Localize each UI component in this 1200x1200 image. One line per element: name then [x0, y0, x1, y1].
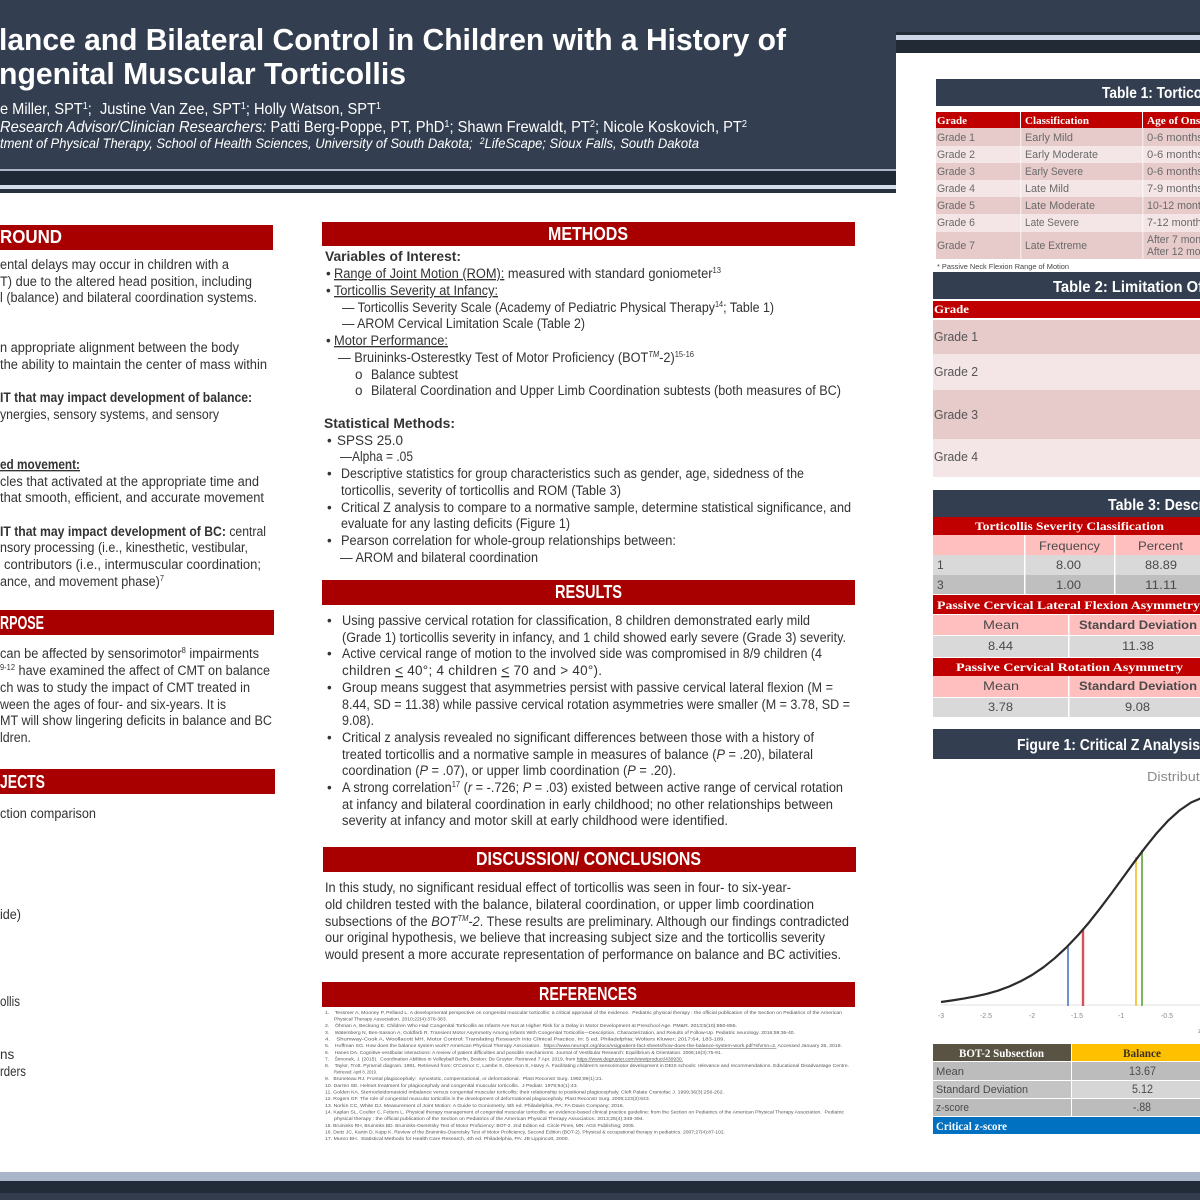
heading: references: REFERENCES — [539, 984, 637, 1004]
text block: discussion: . These results are preliminary. Although our findings contradicted — [480, 914, 871, 929]
text block: purpose: ch was to study the impact of CMT treated in — [0, 680, 250, 695]
table 3: severity classification: 8.00 — [1056, 558, 1081, 572]
text block: reference list: 11. Golden KA. Sternocleidomastoid imbalance versus congenital muscular torticollis: their relationship to positional plagiocephaly. Cleft Palate Craniofac J. 1999;36(3):256-262. — [325, 1090, 724, 1094]
authors: ; Justine Van Zee, SPT — [88, 101, 241, 118]
panel: methods — [322, 222, 855, 565]
chart: normal distribution curve: Distributi — [1147, 769, 1200, 784]
text block: reference list: Physical Therapy Association. 2010;22(4):378-383. — [334, 1016, 447, 1022]
text block: reference list: 12. Rogers GF. The role of congenital muscular torticollis in the development of deformational plagiocephaly. Plast Reconstr Surg. 2009;123(2):643. — [325, 1096, 650, 1101]
text block: discussion: our original hypothesis, we believe that increasing subject size and the torticollis severity — [325, 930, 825, 945]
text block: statistical methods: — AROM and bilateral coordination — [340, 550, 538, 565]
table 3: severity classification: 11.11 — [1145, 578, 1177, 592]
table 1 footnote: * Passive Neck Flexion Range of Motion — [937, 264, 1069, 271]
text block: background: the ability to maintain the center of mass within — [0, 357, 267, 372]
table 1 rows: Grade 1 — [937, 132, 975, 144]
table 1 rows: Grade 6 — [937, 217, 975, 229]
text block: results: • — [327, 780, 332, 795]
table 3: lateral flexion asymmetry: Standard Deviation — [1079, 618, 1197, 632]
text block: variables of interest: o — [355, 383, 363, 398]
table 2 rows: Grade 1 — [934, 329, 978, 344]
title — [0, 22, 787, 91]
text block: variables of interest: -2) — [659, 350, 675, 365]
panel: references — [322, 982, 855, 1141]
panel: table 3 — [933, 490, 1200, 717]
text block: variables of interest: Torticollis Severity at Infancy: — [334, 283, 498, 298]
text block: background: contributors (i.e., intermuscular coordination; — [4, 557, 261, 572]
chart: normal distribution curve: -2 — [1029, 1013, 1035, 1020]
table 3: rotation asymmetry: 9.08 — [1125, 700, 1150, 714]
text block: reference list: physical therapy : the official publication of the Section on Pediatrics of the American Physical Therapy Association. 2013;25(4):348-394. — [334, 1116, 644, 1121]
table 3: rotation asymmetry: Passive Cervical Rotation Asymmetry — [956, 660, 1183, 674]
heading: purpose — [0, 610, 274, 635]
text block: reference list: 5. Hoffman SG. How does the balance system work? American Physical Therapy Association. https://www.neuropt.org/docs/vsigpatient-fact-sheets/how-does-the-balance-system-work.pdf?sfvrsn=2. Accessed January 26, 2018. — [325, 1043, 842, 1048]
authors: 1 — [241, 101, 246, 112]
chart: normal distribution curve: -1.5 — [1071, 1013, 1083, 1020]
authors: ; Nicole Koskovich, PT — [595, 119, 742, 136]
authors: 2 — [590, 119, 595, 130]
text block: statistical methods: • — [327, 466, 332, 481]
text block: variables of interest: 14 — [715, 300, 724, 309]
text block: discussion: TM — [457, 914, 469, 923]
text block: variables of interest: Motor Performance: — [334, 333, 448, 348]
text block: purpose: 9-12 — [0, 663, 16, 672]
text block: variables of interest: Range of Joint Motion (ROM): measured with standard goniometer — [334, 266, 723, 281]
text block: statistical methods — [324, 416, 851, 565]
text block: variables of interest: • — [326, 266, 331, 281]
text block: results: 17 — [452, 780, 461, 789]
text block: background: ental delays may occur in children with a — [0, 257, 229, 272]
table 1 header row: Grade — [937, 116, 967, 127]
text block: background: ance, and movement phase) — [0, 574, 171, 589]
text block: results: r = -.726; P = .03) existed between active range of cervical rotation — [468, 780, 862, 795]
text block: results: • — [327, 646, 332, 661]
table 3: lateral flexion asymmetry — [933, 595, 1200, 657]
text block: variables of interest: o — [355, 367, 363, 382]
table: critical z analysis: Critical z-score — [936, 1119, 1008, 1133]
authors: 1 — [376, 101, 381, 112]
text block: statistical methods: Pearson correlation for whole-group relationships between: — [341, 533, 676, 548]
text block: purpose: 8 — [182, 646, 186, 655]
figure 1 heading — [933, 729, 1200, 759]
table 3: lateral flexion asymmetry: 11.38 — [1122, 639, 1154, 653]
text block: variables of interest: 15-16 — [675, 350, 695, 359]
table 3: severity classification: 1.00 — [1056, 578, 1081, 592]
authors: tment of Physical Therapy, School of Health Sciences, University of South Dakota; — [0, 135, 509, 151]
text block: reference list: 3. Watemberg N, Ben-Sasson A, Goldfarb R. Transient Motor Asymmetry Among Infants With Congenital Torticollis—Description, Characterization, and Results of Follow-Up. Pediatric neurology. 2016;59:36-40. — [325, 1030, 795, 1035]
text block: subjects: ollis — [0, 994, 20, 1009]
table 2 heading — [933, 272, 1200, 299]
panel: background — [0, 225, 273, 589]
text block: variables of interest: Bilateral Coordination and Upper Limb Coordination subtests (both measures of BC) — [371, 383, 841, 398]
text block: results: Critical z analysis revealed no significant differences between those with a history of — [342, 730, 814, 745]
text block: background — [0, 257, 267, 589]
text block: purpose: can be affected by sensorimotor — [0, 646, 192, 661]
panel: subjects — [0, 769, 275, 1079]
table 3: rotation asymmetry: Mean — [983, 679, 1019, 693]
text block: reference list: Retrieved: April 8, 2019. — [334, 1070, 377, 1074]
text block: background: 7 — [160, 574, 165, 583]
text block: reference list: 8. Taylor, Trott. Pyramid diagram. 1991. Retrieved from: O'Connor C, Lambe S, Gleeson S, Harvy Á. Facilitating children's sensorimotor development in DEIS schools: relevance and recommendations. Educational Disadvantage Centre. — [325, 1062, 849, 1068]
panel: purpose — [0, 610, 274, 745]
text block: statistical methods: Descriptive statistics for group characteristics such as gender, age, sidedness of the — [341, 466, 804, 481]
table 2 rows: Grade 4 — [934, 449, 978, 464]
panel: figure 1 — [933, 729, 1200, 1134]
text block: subjects: ide) — [0, 907, 21, 922]
text block: reference list: 13. Norkin CC, White DJ. Measurement of Joint Motion: A Guide to Goniometry. 5th ed. Philadelphia, PA: FA Davis Company; 2016. — [325, 1103, 624, 1108]
authors: 1 — [83, 101, 88, 112]
table: critical z analysis: BOT-2 Subsection — [959, 1046, 1044, 1060]
text block: variables of interest: — Bruininks-Osterestky Test of Motor Proficiency (BOT — [338, 350, 667, 365]
panel: discussion and conclusions — [323, 847, 856, 962]
text block: statistical methods: • — [327, 433, 332, 448]
text block: results: Using passive cervical rotation for classification, 8 children demonstrated early mild — [342, 613, 810, 628]
text block: variables of interest: Balance subtest — [371, 367, 458, 382]
table: critical z analysis: Balance — [1123, 1046, 1162, 1060]
text block: variables of interest: 13 — [713, 266, 722, 275]
table 3: severity classification: 1 — [937, 558, 944, 572]
text block: discussion: would present a more accurate representation of performance on balance and BC activities. — [324, 947, 841, 962]
text block: reference list: 10. Darren SE. Helmet treatment for plagiocephaly and congenital muscular torticollis. J Pediatr. 1979;94(1):43. — [325, 1083, 578, 1088]
text block: purpose: ween the ages of four- and six-years. It is — [0, 697, 226, 712]
authors: e Miller, SPT — [0, 101, 91, 118]
text block: statistical methods: SPSS 25.0 — [337, 433, 403, 448]
text block: results: severity at infancy and motor skill at early childhood were identified. — [342, 813, 728, 828]
text block: results: at infancy and bilateral coordination in early childhood; no other relationships between — [342, 797, 833, 812]
heading: methods — [322, 222, 855, 246]
text block: reference list: 14. Kaplan SL, Coulter C, Fetters L. Physical therapy management of congenital muscular torticollis: an evidence-based clinical practice guideline: from the Section on Pediatrics of the American Physical Therapy Association. Pediatric — [325, 1110, 845, 1114]
text block: background: T) due to the altered head position, including — [0, 274, 252, 289]
text block: results: 8.44, SD = 11.38) while passive cervical rotation asymmetries were smaller (M = 3.78, SD = — [342, 697, 850, 712]
table: critical z analysis: Mean — [936, 1066, 964, 1078]
table 3: severity classification: Frequency — [1039, 539, 1100, 553]
table: critical z analysis — [933, 1044, 1200, 1134]
table 2 rows: Grade 2 — [934, 364, 978, 379]
text block: background: nsory processing (i.e., kinesthetic, vestibular, — [0, 540, 248, 555]
text block: subjects: rders — [0, 1064, 26, 1079]
authors: Research Advisor/Clinician Researchers: Patti Berg-Poppe, PT, PhD — [0, 119, 460, 136]
text block: results: A strong correlation — [342, 780, 458, 795]
text block: reference list: 6. Hanes DA. Cognitive-vestibular interactions: A review of patient difficulties and possible mechanisms. Journal of Vestibular Research: Equilibrium & Orientation. 2006;16(3):75-91. — [325, 1050, 722, 1055]
text block: background: l (balance) and bilateral coordination systems. — [0, 290, 257, 305]
table 1 rows: Late Moderate — [1025, 200, 1095, 212]
heading: methods: METHODS — [548, 224, 628, 244]
text block: results: ( — [460, 780, 468, 795]
text block: variables of interest: Variables of Interest: — [325, 249, 461, 264]
chart: normal distribution curve: -1 — [1118, 1013, 1124, 1020]
heading: results — [322, 580, 855, 605]
table 3: lateral flexion asymmetry: 8.44 — [988, 639, 1013, 653]
heading: subjects — [0, 769, 275, 794]
table 2 header row: Grade — [934, 302, 970, 316]
text block: results: • — [327, 680, 332, 695]
text block: reference list: 9. Bruneteau RJ. Frontal plagiocephaly: synostotic, compensational, or deformational. Plast Reconstr Surg. 1992;89(1):21. — [325, 1076, 603, 1081]
text block: variables of interest: TM — [648, 350, 659, 359]
authors: 2 — [479, 136, 485, 146]
text block: purpose: MT will show lingering deficits in balance and BC — [0, 713, 272, 728]
text block: results: • — [327, 730, 332, 745]
authors: 1 — [444, 119, 450, 130]
heading: purpose: RPOSE — [0, 613, 44, 633]
title: ngenital Muscular Torticollis — [0, 56, 406, 91]
text block: statistical methods: • — [327, 533, 332, 548]
table 2 header row — [933, 301, 1200, 318]
heading: background — [0, 225, 273, 250]
table 3: rotation asymmetry: 3.78 — [988, 700, 1013, 714]
text block: subjects: ns — [0, 1047, 15, 1062]
footer banner — [0, 1172, 1200, 1200]
text block: discussion: old children tested with the balance, bilateral coordination, or upper limb coordination — [325, 897, 814, 912]
table 1 rows: Grade 2 — [937, 149, 975, 161]
table 2 rows: Grade 3 — [934, 407, 978, 422]
text block: statistical methods: torticollis, severity of torticollis and ROM (Table 3) — [341, 483, 621, 498]
text block: statistical methods: —Alpha = .05 — [340, 449, 413, 464]
heading: discussion and conclusions: DISCUSSION/ CONCLUSIONS — [476, 849, 701, 869]
text block: variables of interest: ; Table 1) — [723, 300, 774, 315]
table 1 heading — [936, 79, 1200, 106]
text block: purpose — [0, 646, 272, 745]
table 3: severity classification: Percent — [1138, 539, 1184, 553]
text block: variables of interest: — AROM Cervical Limitation Scale (Table 2) — [342, 316, 585, 331]
table 1 rows: Late Mild — [1025, 183, 1069, 195]
text block: reference list: 4. Shumway-Cook A, Woollacott MH. Motor Control: Translating Research into Clinical Practice. In: 5 ed. Philadelphia: Wolters Kluwer; 2017:64, 183-189. — [325, 1036, 725, 1042]
text block: results: Active cervical range of motion to the involved side was compromised in 8/9 children (4 — [342, 646, 822, 661]
text block: background: that smooth, efficient, and accurate movement — [0, 490, 264, 505]
table 1 rows: Grade 5 — [937, 200, 975, 212]
table 3: rotation asymmetry: Standard Deviation — [1079, 679, 1197, 693]
title: lance and Bilateral Control in Children with a History of — [0, 22, 787, 57]
text block: discussion: -2 — [468, 914, 480, 929]
chart: normal distribution curve: -0.5 — [1161, 1013, 1173, 1020]
heading: results: RESULTS — [555, 582, 622, 602]
panel: table 2 — [933, 272, 1200, 477]
table: critical z analysis: z-score — [936, 1102, 969, 1114]
text block: reference list: 1. Tessmer A, Mooney P, Pelland L. A developmental perspective on congenital muscular torticollis: a critical appraisal of the evidence. Pediatric physical therapy : the official publication of the Section on Pediatrics of the American — [325, 1010, 842, 1015]
text block: results: (Grade 1) torticollis severity in infancy, and 1 child showed early severe (Grade 3) severity. — [342, 630, 846, 645]
text block: results — [327, 613, 850, 828]
table 1 rows: Grade 4 — [937, 183, 975, 195]
table 3: rotation asymmetry — [933, 658, 1200, 717]
text block: background: n appropriate alignment between the body — [0, 340, 239, 355]
table 2 rows — [933, 320, 1200, 477]
text block: variables of interest: • — [326, 333, 331, 348]
table 3: severity classification: 3 — [937, 578, 944, 592]
text block: results: Group means suggest that asymmetries persist with passive cervical lateral flexion (M = — [342, 680, 833, 695]
table 1 rows: Early Moderate — [1025, 149, 1098, 161]
text block: background: ynergies, sensory systems, and sensory — [0, 407, 219, 422]
chart: normal distribution curve: -3 — [938, 1013, 944, 1020]
text block: purpose: ldren. — [0, 730, 31, 745]
header banner — [0, 0, 1200, 193]
text block: variables of interest: • — [326, 283, 331, 298]
text block: results: coordination (P = .07), or upper limb coordination (P = .20). — [342, 763, 676, 778]
text block: background: IT that may impact development of BC: central — [0, 524, 266, 539]
text block: results: 9.08). — [342, 713, 374, 728]
text block: discussion: In this study, no significant residual effect of torticollis was seen in four- to six-year- — [325, 880, 791, 895]
text block: background: cles that activated at the appropriate time and — [0, 474, 259, 489]
text block: subjects: ction comparison — [0, 806, 96, 821]
authors: 2 — [742, 119, 747, 130]
text block: reference list: 15. Bruininks RH, Bruininks BD. Bruininks-Oseretsky Test of Motor Proficiency: BOT-2. 2nd Edition ed. Circle Pines, MN: AGS Publishing; 2005. — [325, 1123, 635, 1128]
text block: reference list: 2. Öhman A, Beckung E. Children Who Had Congenital Torticollis as Infants Are Not at Higher Risk for a Delay in Motor Development at Preschool Age. PM&R. 2013;5(10):850-855. — [325, 1022, 737, 1028]
table 1 rows: Late Severe — [1025, 217, 1079, 229]
table: critical z analysis: 13.67 — [1129, 1064, 1156, 1078]
text block: purpose: have examined the affect of CMT on balance — [15, 663, 270, 678]
text block: subjects — [0, 806, 96, 1079]
table: critical z analysis: Standard Deviation — [936, 1084, 1028, 1096]
table: critical z analysis: -.88 — [1133, 1100, 1151, 1114]
text block: discussion: subsections of the BOT — [325, 914, 459, 929]
authors: LifeScape; Sioux Falls, South Dakota — [485, 135, 699, 151]
text block: statistical methods: Critical Z analysis to compare to a normative sample, determine statistical significance, and — [341, 500, 851, 515]
panel: results — [322, 580, 855, 828]
text block: results: • — [327, 613, 332, 628]
table 1 rows: Early Mild — [1025, 132, 1073, 144]
text block: reference list: 17. Munro BH. Statistical Methods for Health Care Research, 4th ed. Philadelphia, PA: JB Lippincott, 2000. — [325, 1136, 569, 1141]
text block: reference list: 16. Deitz JC, Kartin D, Kopp K. Review of the Bruininks-Oseretsky Test of Motor Proficiency, Second Edition (BOT-2). Physical & occupational therapy in pediatrics. 2007;27(4):87-102. — [325, 1130, 725, 1134]
table 1 rows: Grade 3 — [937, 166, 975, 178]
text block: background: ed movement: — [0, 457, 80, 472]
table 1 rows: Grade 7 — [937, 240, 975, 252]
table 3: severity classification: Torticollis Severity Classification — [975, 519, 1164, 533]
table 3 heading — [933, 490, 1200, 517]
table 1 header row — [936, 112, 1200, 128]
text block: background: IT that may impact development of balance: — [0, 390, 252, 405]
text block: purpose: impairments — [186, 646, 259, 661]
table: critical z analysis: 5.12 — [1132, 1082, 1153, 1096]
text block: reference list — [325, 1010, 849, 1141]
table 3: lateral flexion asymmetry: Mean — [983, 618, 1019, 632]
chart: normal distribution curve: -2.5 — [980, 1013, 992, 1020]
heading: background: ROUND — [0, 227, 62, 247]
text block: statistical methods: evaluate for any lasting deficits (Figure 1) — [341, 516, 570, 531]
authors: ; Holly Watson, SPT — [246, 101, 376, 118]
table 1 header row: Classification — [1025, 116, 1089, 127]
table 3: severity classification: 88.89 — [1145, 558, 1177, 572]
heading: references — [322, 982, 855, 1007]
text block: variables of interest: — Torticollis Severity Scale (Academy of Pediatric Physical Therapy — [342, 300, 747, 315]
table 3: lateral flexion asymmetry: Passive Cervical Lateral Flexion Asymmetry — [937, 598, 1200, 612]
authors — [0, 101, 747, 151]
heading: discussion and conclusions — [323, 847, 856, 872]
text block: statistical methods: • — [327, 500, 332, 515]
text block: statistical methods: Statistical Methods: — [324, 416, 455, 431]
text block: results: children < 40°; 4 children < 70 and > 40°). — [342, 663, 602, 678]
table 1 rows: Late Extreme — [1025, 240, 1087, 252]
panel: table 1 — [936, 79, 1200, 271]
table 1 rows: Early Severe — [1025, 166, 1083, 178]
text block: reference list: 7. Šimonek, J. (2015). Coordination Abilities in Volleyball Berlin, Boston: De Gruyter. Retrieved 7 Apr. 2019, from https://www.degruyter.com/view/product/430930. — [325, 1056, 683, 1062]
text block: variables of interest — [325, 249, 841, 398]
heading: subjects: JECTS — [0, 772, 45, 792]
chart: normal distribution curve — [938, 769, 1200, 1035]
text block: results: treated torticollis and a normative sample in measures of balance (P = .20), bilateral — [342, 747, 813, 762]
authors: ; Shawn Frewaldt, PT — [449, 119, 590, 136]
table 3: severity classification — [933, 517, 1200, 594]
table 1 rows — [936, 128, 1200, 259]
text block: discussion — [324, 880, 849, 962]
